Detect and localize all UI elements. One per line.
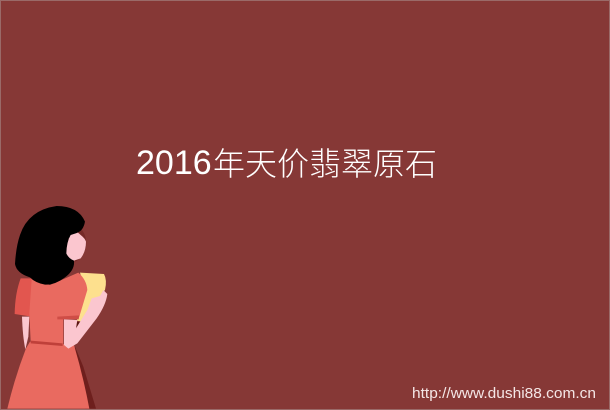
face (66, 233, 86, 261)
website url: http://www.dushi88.com.cn (412, 385, 596, 402)
title: 年天价翡翠原石 (213, 146, 437, 182)
title: 2016 (136, 144, 212, 182)
hair (15, 206, 85, 285)
back arm (22, 317, 29, 349)
front arm and hand (64, 290, 107, 349)
back sleeve (15, 278, 33, 317)
waist band (31, 341, 63, 346)
book (76, 273, 106, 327)
dress bodice (29, 273, 87, 345)
illustration: woman holding a book (7, 206, 107, 409)
dress skirt (7, 342, 89, 409)
dress shadow (75, 347, 96, 409)
hair shadow (72, 227, 86, 262)
sleeve fold (57, 315, 79, 319)
